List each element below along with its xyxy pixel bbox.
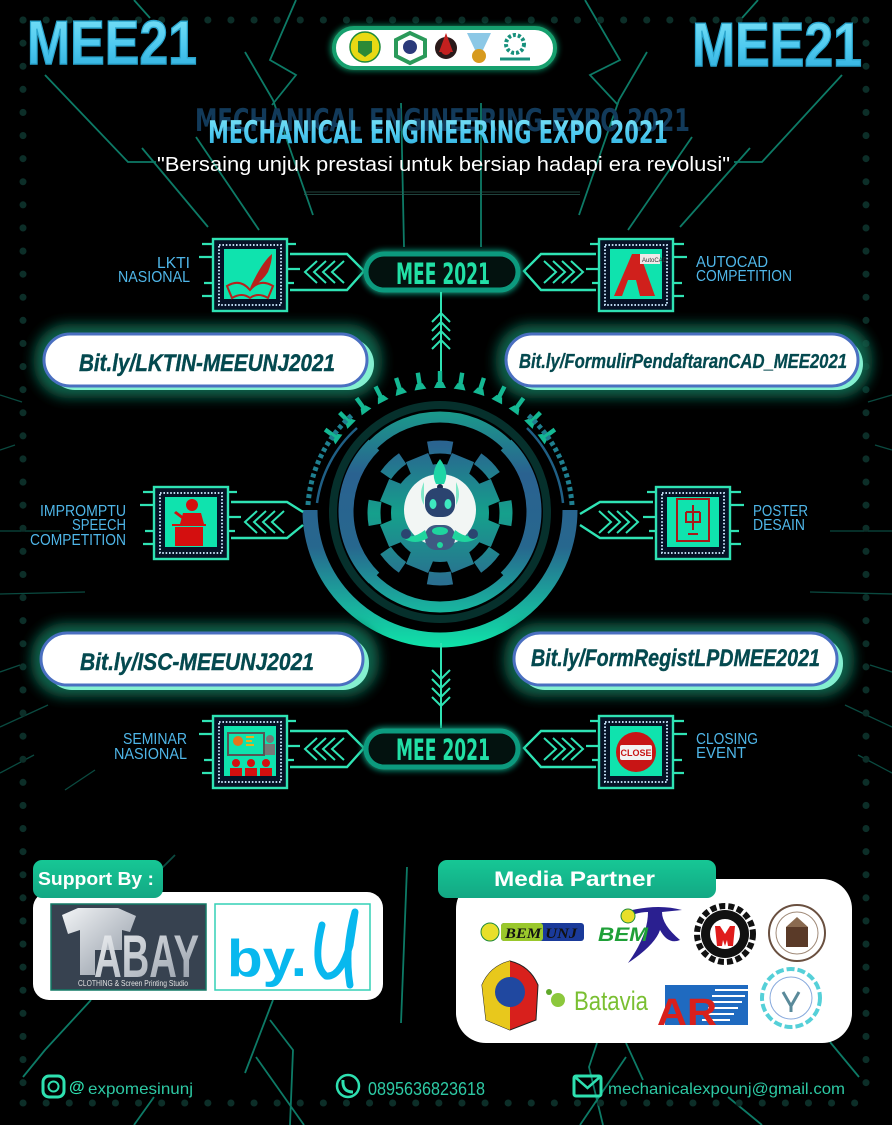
logo: BEM UNJ <box>481 923 584 942</box>
connector bottom left <box>290 731 364 767</box>
logo MEE21 right: MEE21 <box>692 11 862 80</box>
link pill: LPD <box>504 623 854 697</box>
label: Seminar Nasional <box>114 731 187 763</box>
connector middle left <box>231 502 303 538</box>
contact: phone: 0895636823618 <box>368 1079 485 1099</box>
label: Impromptu Speech Competition: COMPETITION <box>30 532 126 549</box>
label: AutoCAD Competition: COMPETITION <box>696 268 792 285</box>
label: Poster Desain <box>753 503 808 534</box>
logo: AR Automotive: AR <box>657 992 717 1034</box>
label: Closing Event: CLOSING <box>696 731 758 748</box>
logo: by.U: by. <box>227 930 307 988</box>
thin blue arcs <box>317 428 563 503</box>
chip: Poster Desain <box>643 487 744 559</box>
chip: AutoCAD <box>586 239 687 311</box>
contact: phone <box>337 1075 485 1099</box>
label: LKTI Nasional: NASIONAL <box>118 269 190 286</box>
icon: book and quill <box>227 254 273 298</box>
link pill: AutoCAD <box>496 324 872 398</box>
link pill: LKTI: Bit.ly/LKTIN-MEEUNJ2021 <box>79 350 335 377</box>
logo: AR Automotive <box>657 985 748 1034</box>
label: Seminar Nasional: SEMINAR <box>123 731 187 748</box>
outer ring <box>310 510 570 640</box>
label: Impromptu Speech Competition: IMPROMPTU <box>40 503 126 520</box>
institution logos pill <box>330 25 558 71</box>
icon: seminar <box>228 733 275 776</box>
chip: Closing Event <box>586 716 687 788</box>
heading: support by <box>33 860 163 898</box>
logo: university emblem <box>350 32 380 62</box>
arrow: down connector <box>432 643 450 728</box>
arrow: up connector <box>432 292 450 380</box>
icon: poster design <box>677 499 709 541</box>
label: Impromptu Speech Competition <box>30 503 126 549</box>
badge: MEE 2021 bottom: MEE 2021 <box>396 733 490 767</box>
tagline: "Bersaing unjuk prestasi untuk bersiap hadapi era revolusi" <box>157 154 730 176</box>
badge: MEE 2021 bottom <box>362 727 522 771</box>
contact: instagram: expomesinunj <box>88 1081 193 1098</box>
logo: round brown seal <box>769 905 825 961</box>
logo: BEM pi <box>598 907 682 963</box>
label: Poster Desain: POSTER <box>753 503 808 520</box>
chip: Impromptu Speech <box>140 487 241 559</box>
dotted side arcs <box>308 415 572 505</box>
heading: media partner <box>438 860 716 898</box>
logo: red gear emblem <box>435 33 457 59</box>
connector left top <box>290 254 364 290</box>
contact: instagram: @ <box>69 1079 85 1096</box>
panel: support by <box>33 892 383 1000</box>
robot mascot <box>401 459 478 550</box>
logo: ABAY <box>51 904 206 990</box>
logo: BEM UNJ: BEM UNJ <box>504 926 578 942</box>
heading: media partner: Media Partner <box>494 868 655 891</box>
tick marks arc <box>322 371 558 444</box>
central gear emblem <box>308 371 572 640</box>
heading: support by: Support By : <box>38 869 154 889</box>
logo: ABAY: ABAY <box>94 923 199 990</box>
dark ring <box>333 405 547 619</box>
logo: teal gear and wrench <box>500 35 530 59</box>
connector right top <box>524 254 596 290</box>
badge: MEE 2021 top: MEE 2021 <box>396 257 490 291</box>
logo: BEM pi: BEM <box>598 925 649 946</box>
icon: closed sign: CLOSE <box>620 748 652 758</box>
link pill: LPD: Bit.ly/FormRegistLPDMEE2021 <box>531 645 820 672</box>
label: Seminar Nasional: NASIONAL <box>114 746 187 763</box>
main title: MECHANICAL ENGINEERING EXPO 2021 <box>208 115 668 151</box>
label: AutoCAD Competition: AUTOCAD <box>696 254 768 271</box>
label: Closing Event <box>696 731 758 762</box>
label: Impromptu Speech Competition: SPEECH <box>72 517 126 534</box>
icon: speaker at podium <box>172 499 206 546</box>
logo: blue and gold shield <box>467 33 491 63</box>
logo: ABAY: CLOTHING & Screen Printing Studio <box>78 979 188 988</box>
inner ring <box>345 417 535 607</box>
label: LKTI Nasional <box>118 255 190 286</box>
contact: instagram <box>43 1076 193 1098</box>
chip: LKTI <box>199 239 300 311</box>
panel: media partner <box>456 879 852 1043</box>
inner ring thick side bands <box>346 445 534 578</box>
icon: AutoCAD logo: AutoCAD <box>642 258 668 264</box>
logo: by.U <box>215 904 370 990</box>
main title shadow: MECHANICAL ENGINEERING EXPO 2021 <box>195 103 690 139</box>
logo: Batavia <box>546 986 649 1016</box>
connector bottom right <box>524 731 596 767</box>
gear <box>368 440 512 586</box>
logo: red and yellow shield <box>482 961 538 1030</box>
logo: hexagon emblem <box>396 33 425 63</box>
label: LKTI Nasional: LKTI <box>157 255 190 272</box>
connector middle right <box>580 502 653 538</box>
label: Poster Desain: DESAIN <box>753 517 805 534</box>
contact: email <box>574 1076 845 1098</box>
logo: Batavia: Batavia <box>574 986 649 1016</box>
logo: mechanical gear <box>697 906 753 962</box>
link pill: ISC <box>31 623 379 697</box>
chip: Seminar Nasional <box>199 716 300 788</box>
label: Closing Event: EVENT <box>696 745 746 762</box>
link pill: ISC: Bit.ly/ISC-MEEUNJ2021 <box>80 649 314 676</box>
logo: teal flower seal <box>762 969 820 1027</box>
logo MEE21 left: MEE21 <box>27 9 197 78</box>
label: AutoCAD Competition <box>696 254 792 285</box>
contact: email: mechanicalexpounj@gmail.com <box>608 1081 845 1098</box>
badge: MEE 2021 top <box>362 250 522 294</box>
link pill: LKTI <box>34 324 382 398</box>
